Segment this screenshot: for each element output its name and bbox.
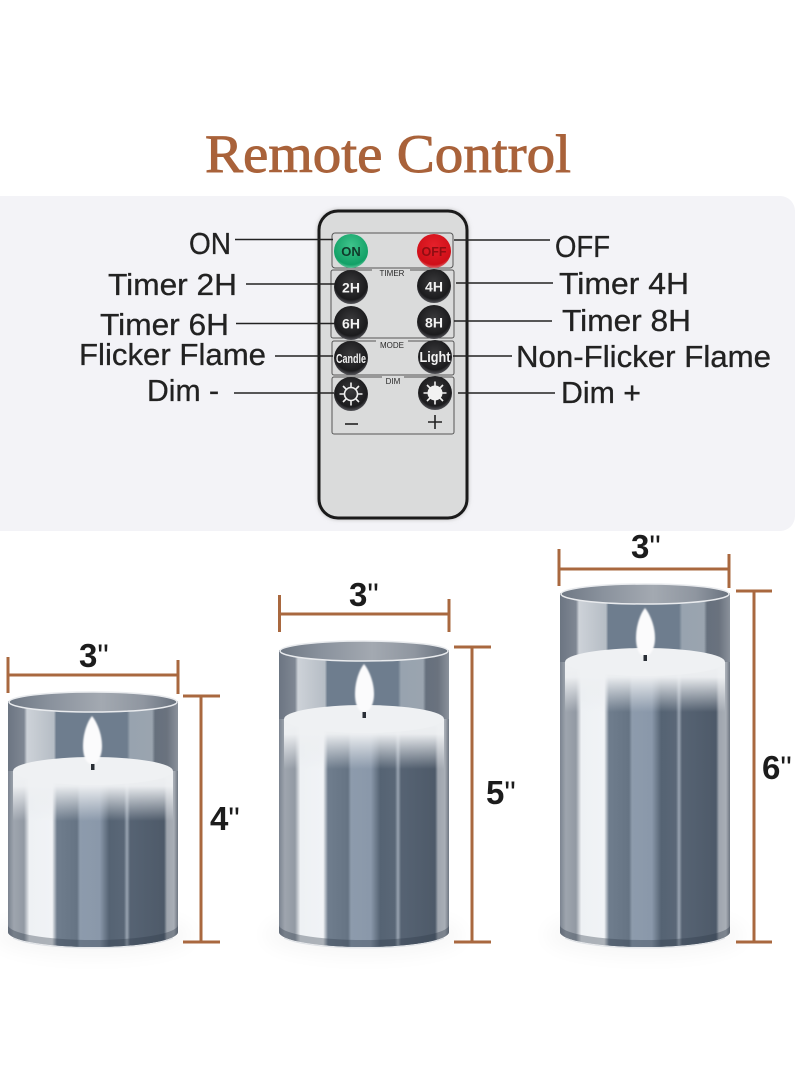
remote body: TIMER bbox=[380, 269, 405, 278]
label: Dim minus: Dim - bbox=[147, 373, 219, 408]
label: ON: ON bbox=[189, 226, 231, 261]
dimension: candle 2 width: 3" bbox=[349, 576, 379, 613]
button: 4H bbox=[417, 269, 451, 303]
label: Timer 8H: Timer 8H bbox=[562, 303, 691, 338]
button: Candle: Candle bbox=[336, 352, 366, 366]
dimension: candle 2 height bbox=[454, 647, 516, 942]
label: Timer 6H: Timer 6H bbox=[100, 307, 229, 342]
button: 8H bbox=[417, 305, 451, 339]
dimension: candle 3 width bbox=[559, 528, 729, 588]
button: 8H: 8H bbox=[425, 314, 443, 330]
button: Light bbox=[418, 340, 452, 374]
candle: 4 inch bbox=[0, 692, 193, 957]
button: dim minus bbox=[334, 377, 368, 411]
dimension: candle 3 width: 3" bbox=[631, 528, 661, 565]
dimension: candle 1 height bbox=[183, 696, 240, 942]
button: 6H: 6H bbox=[342, 316, 360, 332]
button: OFF: OFF bbox=[422, 245, 447, 259]
dimension: candle 1 width bbox=[8, 637, 178, 694]
button: ON bbox=[334, 234, 368, 268]
button: dim plus bbox=[418, 376, 452, 410]
panel: remote control diagram bbox=[0, 196, 795, 531]
dimension: candle 1 width: 3" bbox=[79, 637, 109, 674]
candle: 6 inch bbox=[545, 584, 745, 957]
button: 4H: 4H bbox=[425, 278, 443, 294]
button: 2H bbox=[334, 270, 368, 304]
remote body: DIM bbox=[386, 377, 401, 386]
dimension: candle 2 height: 5" bbox=[486, 774, 516, 811]
dimension: candle 2 width bbox=[280, 576, 449, 632]
plus sign bbox=[428, 415, 442, 429]
label: Timer 2H: Timer 2H bbox=[108, 267, 237, 302]
button: Light: Light bbox=[420, 349, 450, 366]
button: ON: ON bbox=[341, 244, 361, 259]
candle: 5 inch bbox=[264, 641, 464, 957]
remote body bbox=[318, 210, 468, 519]
label: Dim plus: Dim + bbox=[561, 375, 641, 410]
dimension: candle 1 height: 4" bbox=[210, 800, 240, 837]
label: OFF: OFF bbox=[555, 229, 610, 264]
label: Flicker Flame: Flicker Flame bbox=[79, 337, 266, 372]
leader lines bbox=[234, 240, 555, 393]
button: 6H bbox=[334, 306, 368, 340]
button: 2H: 2H bbox=[342, 280, 360, 296]
dimension: candle 3 height: 6" bbox=[762, 749, 792, 786]
minus sign bbox=[345, 423, 358, 425]
label: Non-Flicker Flame: Non-Flicker Flame bbox=[516, 339, 771, 374]
remote body: MODE bbox=[380, 341, 404, 350]
button: Candle bbox=[334, 341, 368, 375]
button: OFF bbox=[417, 234, 451, 268]
dimension: candle 3 height bbox=[736, 591, 792, 942]
label: Timer 4H: Timer 4H bbox=[559, 266, 689, 301]
title: Remote Control bbox=[205, 124, 571, 184]
